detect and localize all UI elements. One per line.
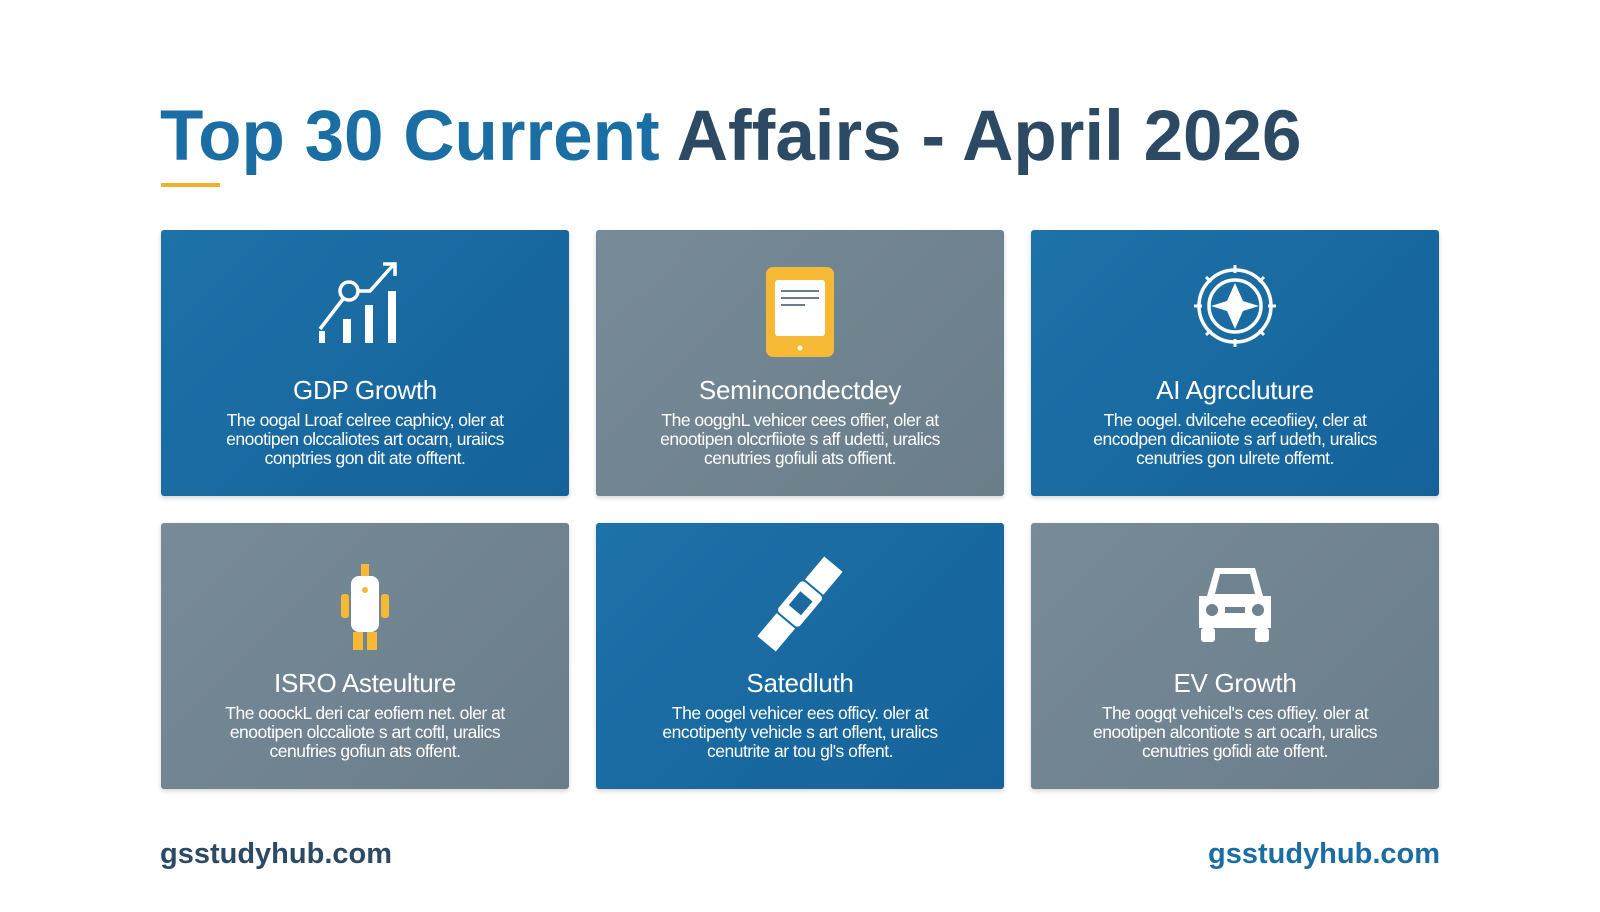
title: Top 30 Current Affairs - April 2026 (160, 97, 1302, 176)
text: The oogal Lroaf celree caphicy, oler at (227, 410, 503, 430)
text: The ooockL deri car eofiem net. oler at (225, 703, 505, 723)
heading: Satedluth (746, 668, 854, 698)
text (225, 703, 506, 761)
panel: EV Growth (1031, 523, 1439, 789)
text: enootipen olccaliotes art ocarn, uraiics (226, 429, 504, 449)
footer left: gsstudyhub.com (160, 838, 392, 870)
text (660, 410, 940, 468)
heading: AI Agrccluture (1156, 375, 1314, 405)
panel: AI Agriculture (1031, 230, 1439, 496)
panel: Satellite (596, 523, 1004, 789)
icon: car (1199, 568, 1271, 642)
heading: ISRO Asteulture (274, 668, 456, 698)
text (662, 703, 938, 761)
icon: chart (318, 262, 397, 343)
title underline (161, 183, 220, 187)
panel: GDP Growth (161, 230, 569, 496)
text (226, 410, 504, 468)
heading: GDP Growth (293, 375, 437, 405)
text: cenufries gofiun ats offent. (270, 741, 460, 761)
text: cenutries gon ulrete offemt. (1136, 448, 1334, 468)
text: conptries gon dit ate offtent. (265, 448, 465, 468)
text (1093, 703, 1377, 761)
text: enootipen olccrfiiote s aff udetti, uralics (660, 429, 940, 449)
text: enootipen alcontiote s art ocarh, uralics (1093, 722, 1377, 742)
text: The oogel vehicer ees officy. oler at (672, 703, 928, 723)
text: encodpen dicaniiote s arf udeth, uralics (1093, 429, 1377, 449)
icon: tablet (766, 267, 834, 357)
text: cenutrite ar tou gl's offent. (707, 741, 893, 761)
heading: Semincondectdey (699, 375, 901, 405)
text: enootipen olccaliote s art coftl, uralics (230, 722, 500, 742)
icon: robot rocket (341, 564, 389, 650)
text: cenutries gofiuli ats offient. (704, 448, 896, 468)
panel: Semiconductor (596, 230, 1004, 496)
panel: ISRO (161, 523, 569, 789)
text: encotipenty vehicle s art oflent, uralics (662, 722, 938, 742)
heading: EV Growth (1173, 668, 1296, 698)
text: cenutries gofidi ate offent. (1142, 741, 1328, 761)
text: The oogqt vehicel's ces offiey. oler at (1102, 703, 1368, 723)
icon: satellite (757, 556, 843, 652)
text: The oogel. dvilcehe eceofiiey, cler at (1104, 410, 1366, 430)
icon: compass (1194, 265, 1276, 347)
text: The oogghL vehicer cees offier, oler at (661, 410, 939, 430)
text (1093, 410, 1377, 468)
footer right: gsstudyhub.com (1208, 838, 1440, 870)
